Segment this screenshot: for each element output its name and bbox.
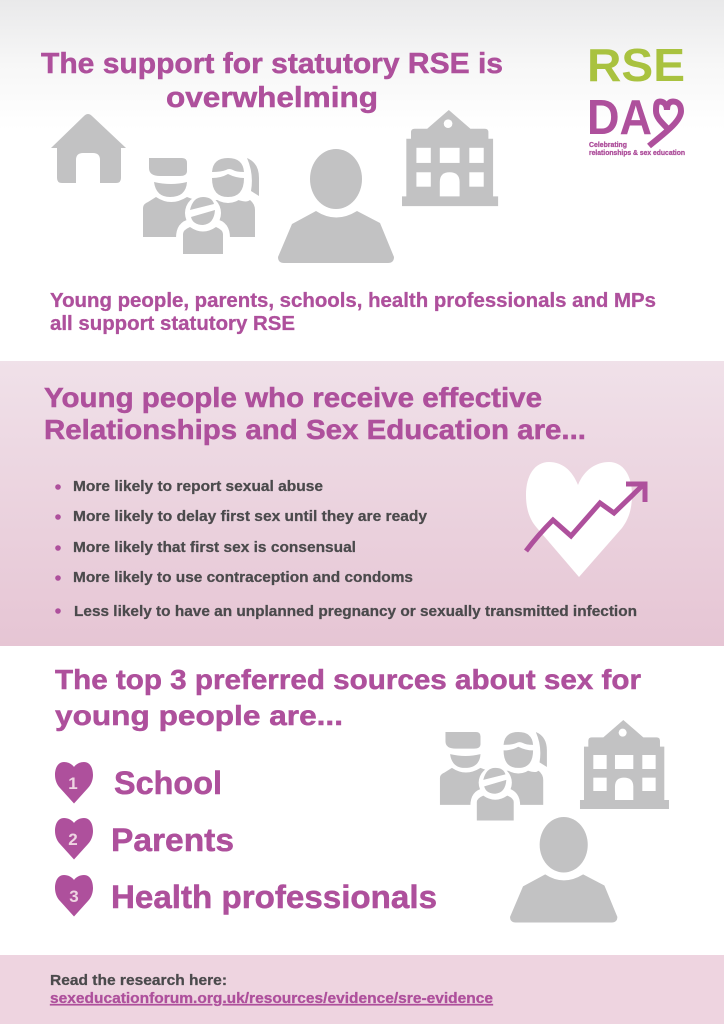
- title: [41, 48, 503, 114]
- text: who supports statutory RSE: all support statutory RSE: [50, 313, 295, 335]
- bullet list: Less likely to have an unplanned pregnancy or sexually transmitted infection: [74, 604, 637, 620]
- logo: RSE Day: DA: [587, 91, 652, 145]
- icon: school: [580, 720, 669, 809]
- ranked item: 3 Health professionals: 3: [69, 887, 79, 906]
- icon: person: [510, 817, 617, 922]
- panel: top 3 preferred sources: [55, 664, 669, 922]
- bullet list: [55, 479, 637, 620]
- icon: person: [278, 149, 394, 263]
- logo: RSE Day: [587, 39, 685, 157]
- icon: heart with rising arrow: [526, 462, 645, 577]
- panel: support for statutory RSE: [41, 39, 685, 335]
- icon: family: [143, 158, 259, 256]
- panel: footer research link: [0, 955, 724, 1024]
- bullet list: More likely to report sexual abuse: [73, 479, 323, 495]
- icon: school: [402, 110, 498, 206]
- ranked item: 2 Parents: [55, 818, 234, 860]
- panel: effective RSE benefits: [0, 361, 724, 646]
- icon: house: [51, 114, 126, 183]
- ranked item: 1 School: 1: [68, 774, 78, 793]
- heading: [55, 664, 641, 731]
- text: who supports statutory RSE: [50, 290, 656, 335]
- text: read the research: Read the research here:: [50, 973, 227, 989]
- bullet list: More likely to delay first sex until they are ready: [73, 509, 427, 525]
- text: who supports statutory RSE: Young people, parents, schools, health professionals and MPs: [50, 290, 656, 312]
- ranked item: 2 Parents: 2: [68, 830, 78, 849]
- logo: RSE Day: relationships & sex education: [589, 148, 685, 157]
- icon: family: [440, 732, 547, 822]
- ranked item: 1 School: [55, 762, 222, 804]
- logo: RSE Day: Celebrating: [589, 140, 627, 149]
- ranked item: 1 School: School: [114, 765, 222, 801]
- heading: young people are...: [55, 700, 343, 731]
- logo: RSE Day: RSE: [587, 39, 685, 91]
- heading: Young people who receive effective: [44, 382, 542, 413]
- heading: Relationships and Sex Education are...: [44, 414, 586, 445]
- ranked item: 3 Health professionals: Health professionals: [111, 879, 437, 915]
- bullet list: More likely that first sex is consensual: [73, 540, 356, 556]
- ranked item: 2 Parents: Parents: [111, 822, 234, 858]
- title: The support for statutory RSE is: [41, 48, 503, 80]
- heading: [44, 382, 586, 445]
- title: overwhelming: [166, 82, 378, 114]
- heading: The top 3 preferred sources about sex for: [55, 664, 641, 695]
- bullet list: More likely to use contraception and condoms: [73, 570, 413, 586]
- link: research URL: sexeducationforum.org.uk/resources/evidence/sre-evidence: [50, 991, 493, 1007]
